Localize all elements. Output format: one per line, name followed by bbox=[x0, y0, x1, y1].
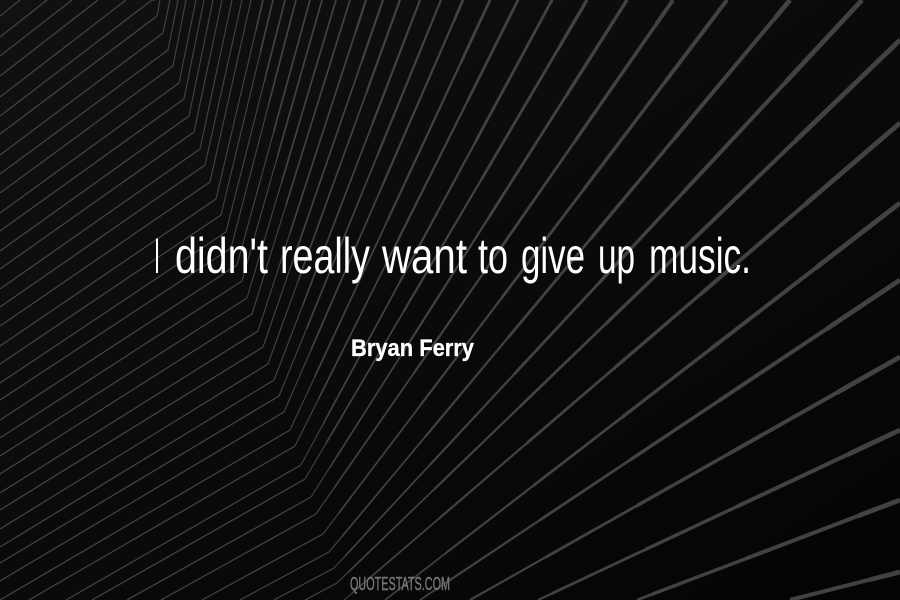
quote text: didn't bbox=[175, 228, 268, 284]
left line field bbox=[0, 0, 337, 600]
author name: Bryan Ferry bbox=[351, 335, 475, 362]
quote text: want bbox=[381, 228, 467, 284]
watermark: QUOTESTATS.COM bbox=[350, 574, 450, 594]
quote text: music. bbox=[649, 228, 751, 284]
quote text: give bbox=[521, 228, 585, 284]
quote text: up bbox=[598, 228, 635, 284]
quote text: really bbox=[280, 228, 370, 284]
quote text: to bbox=[478, 228, 508, 284]
quote text: I bbox=[154, 228, 160, 284]
